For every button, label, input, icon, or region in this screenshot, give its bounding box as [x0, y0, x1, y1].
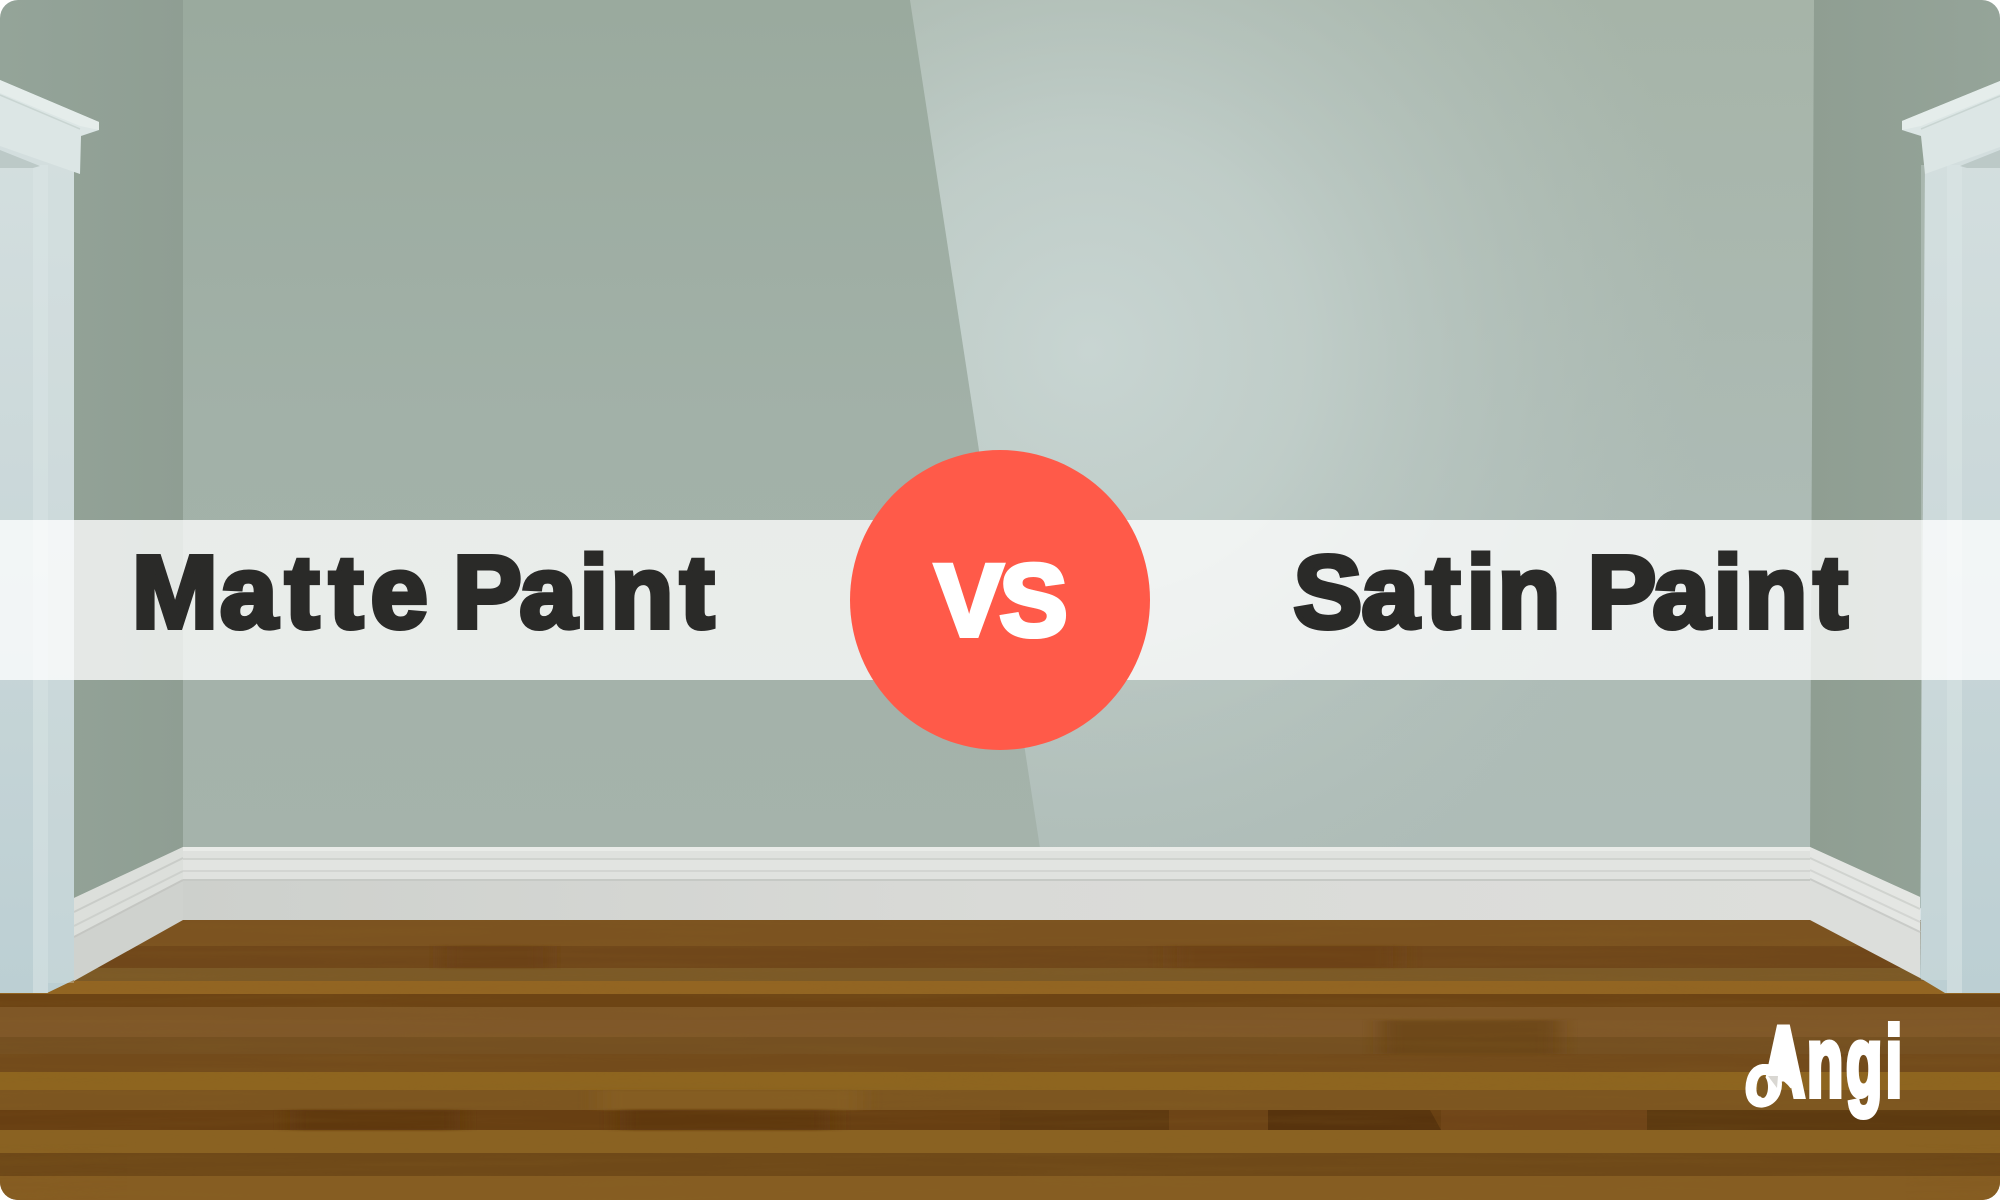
translucent title band — [0, 520, 2000, 680]
right side wall — [1810, 0, 2000, 950]
Angi logo: Angi — [1762, 1007, 1902, 1118]
left side wall — [0, 0, 183, 950]
back wall: matte side — [183, 0, 1040, 847]
vs badge: VS — [935, 544, 1068, 658]
right cornice — [1902, 81, 2000, 174]
left baseboard — [74, 847, 183, 981]
heading: Satin Paint: Satin Paint — [1294, 534, 1848, 650]
left door casing — [0, 120, 74, 993]
heading: Matte Paint: Matte Paint — [132, 534, 714, 650]
vs badge — [850, 450, 1150, 750]
back baseboard — [183, 847, 1810, 920]
right door casing — [1920, 120, 2000, 993]
right baseboard — [1810, 847, 1920, 978]
left cornice — [0, 80, 99, 174]
back wall: satin side with light reflection — [910, 0, 1815, 848]
wood floor — [0, 920, 2000, 1200]
